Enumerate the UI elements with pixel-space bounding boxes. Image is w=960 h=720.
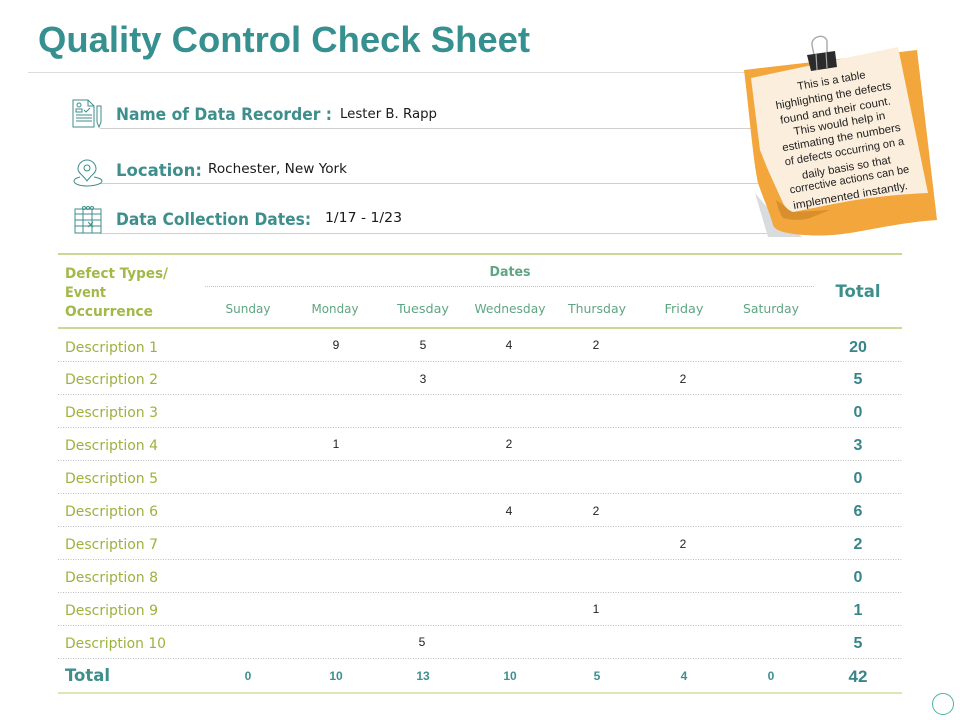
- row totals: 3: [854, 437, 863, 454]
- total row: 0: [245, 669, 252, 683]
- row labels: Description 8: [65, 570, 158, 586]
- row totals: 1: [854, 602, 863, 619]
- table header: Total: [836, 282, 880, 302]
- table header: Sunday: [226, 302, 270, 316]
- note text: corrective actions can be: [789, 164, 910, 196]
- total row: 10: [329, 669, 343, 683]
- total row: 4: [681, 669, 688, 683]
- value: dates: 1/17 - 1/23: [325, 211, 402, 226]
- table header: Saturday: [743, 302, 799, 316]
- note text: daily basis so that: [801, 154, 892, 182]
- note text: This is a table: [796, 69, 866, 93]
- label: name of data recorder: Name of Data Recorder :: [116, 105, 332, 125]
- note text: of defects occurring on a: [784, 135, 906, 168]
- row totals: [849, 339, 867, 652]
- daily counts: 2: [680, 372, 687, 386]
- row labels: Description 6: [65, 504, 158, 520]
- note text: [775, 69, 910, 212]
- daily counts: 2: [680, 537, 687, 551]
- table header: Event: [65, 285, 106, 301]
- row totals: 0: [854, 569, 863, 586]
- daily counts: 9: [333, 338, 340, 352]
- table header: Defect Types/: [65, 266, 169, 282]
- daily counts: 2: [506, 437, 513, 451]
- note shadow: [755, 193, 802, 237]
- daily counts: 5: [419, 635, 426, 649]
- title: Quality Control Check Sheet: [38, 19, 530, 60]
- row totals: 5: [854, 371, 863, 388]
- table header: Thursday: [567, 302, 626, 316]
- table header: Occurrence: [65, 304, 153, 320]
- row totals: 2: [854, 536, 863, 553]
- icon: form with pencil: [73, 100, 101, 127]
- row totals: 5: [854, 635, 863, 652]
- row labels: Description 3: [65, 405, 158, 421]
- note fold: [776, 200, 830, 220]
- total row: 10: [503, 669, 517, 683]
- binder clip: [807, 36, 837, 71]
- check sheet table: [58, 254, 902, 693]
- daily counts: 5: [420, 338, 427, 352]
- row labels: Description 5: [65, 471, 158, 487]
- daily counts: 4: [506, 504, 513, 518]
- table header: [65, 265, 880, 320]
- daily counts: [333, 338, 687, 649]
- daily counts: 2: [593, 338, 600, 352]
- daily counts: 1: [593, 602, 600, 616]
- corner circle icon: [932, 694, 954, 714]
- row labels: Description 7: [65, 537, 158, 553]
- row labels: [65, 340, 166, 652]
- daily counts: 2: [593, 504, 600, 518]
- note text: estimating the numbers: [781, 122, 902, 154]
- panel: recorder information: [73, 100, 775, 234]
- note text: highlighting the defects: [775, 80, 893, 112]
- row labels: Description 9: [65, 603, 158, 619]
- total row: 13: [416, 669, 430, 683]
- note text: This would help in: [793, 110, 886, 138]
- row totals: 6: [854, 503, 863, 520]
- value: location: Rochester, New York: [208, 162, 347, 177]
- sticky note callout: [744, 36, 937, 237]
- daily counts: 1: [333, 437, 340, 451]
- row labels: Description 2: [65, 372, 158, 388]
- label: location: Location:: [116, 161, 202, 181]
- daily counts: 3: [420, 372, 427, 386]
- note backing: [744, 50, 937, 236]
- row totals: 0: [854, 470, 863, 487]
- total row: 42: [849, 667, 867, 686]
- table header: Monday: [312, 302, 358, 316]
- row labels: Description 10: [65, 636, 166, 652]
- row labels: Description 1: [65, 340, 158, 356]
- note paper: [751, 47, 928, 212]
- table header: Dates: [490, 265, 531, 280]
- table header: Friday: [664, 302, 704, 316]
- table header: Wednesday: [474, 302, 546, 316]
- note text: found and their count.: [779, 95, 892, 127]
- total row: Total: [65, 666, 110, 686]
- row totals: 20: [849, 339, 867, 356]
- row labels: Description 4: [65, 438, 158, 454]
- total row: [65, 666, 867, 686]
- total row: 0: [768, 669, 775, 683]
- icon: location pin: [74, 160, 102, 186]
- note text: implemented instantly.: [792, 180, 909, 212]
- row totals: 0: [854, 404, 863, 421]
- total row: 5: [594, 669, 601, 683]
- value: recorder name: Lester B. Rapp: [340, 107, 437, 122]
- daily counts: 4: [506, 338, 513, 352]
- label: data collection dates: Data Collection Dates:: [116, 210, 311, 230]
- icon: calendar: [75, 206, 101, 233]
- table header: Tuesday: [396, 302, 449, 316]
